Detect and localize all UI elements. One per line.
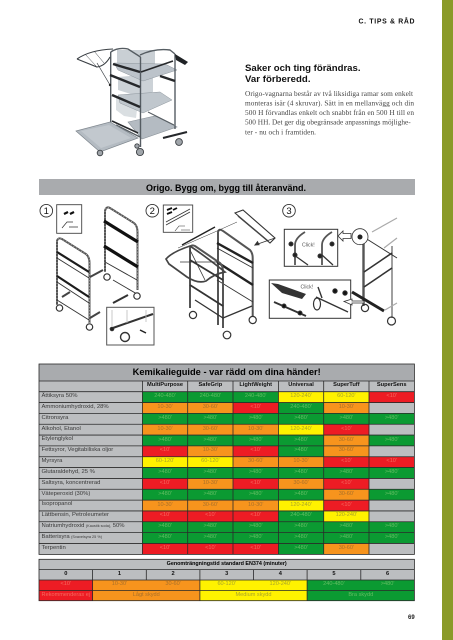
body text: 500 HH. Det ger dig obegränsade anpassnings möjlighe- bbox=[245, 118, 411, 127]
chemical guide table: 30-60' bbox=[339, 447, 354, 453]
chemical guide table: Ättiksyra 50% bbox=[42, 393, 78, 399]
bins bbox=[117, 50, 155, 73]
step 2 illustration bbox=[146, 204, 275, 339]
body text: Origo-vagnarna består av två liksidiga ramar som enkelt bbox=[245, 89, 413, 98]
chemical guide table: <10' bbox=[341, 480, 352, 486]
chemical guide table: <10' bbox=[160, 447, 170, 453]
chemical guide table: >480' bbox=[340, 523, 353, 529]
step number 3: 3 bbox=[286, 206, 292, 217]
chemical guide table: >480' bbox=[204, 415, 217, 421]
legend table: >480' bbox=[381, 581, 394, 587]
body text: monteras isär (4 skruvar). Sätt in en mellanvägg och din bbox=[245, 98, 414, 108]
arrow 2 bbox=[344, 299, 364, 305]
chemical guide table: <10' bbox=[250, 447, 261, 453]
chemical guide table: 10-30' bbox=[157, 426, 173, 432]
chemical guide table: SafeGrip bbox=[199, 382, 222, 388]
shelves bbox=[114, 63, 177, 81]
chemical guide table: >480' bbox=[294, 491, 308, 497]
chemical guide table: <10' bbox=[160, 545, 170, 551]
chemical guide table: 10-30' bbox=[248, 502, 263, 508]
chemical guide table: Citronsyra bbox=[42, 415, 68, 421]
legend table: 5 bbox=[332, 571, 336, 577]
right frame bbox=[104, 207, 140, 303]
legend table: 10-30' bbox=[112, 581, 127, 587]
chemical guide table: >480' bbox=[249, 415, 263, 421]
back frame bbox=[217, 230, 253, 325]
chemical guide table: 10-30' bbox=[157, 404, 173, 410]
frame bbox=[352, 218, 397, 325]
legend table: 1 bbox=[118, 571, 121, 577]
chemical guide table: Isopropanol bbox=[42, 501, 72, 507]
side bar bbox=[442, 0, 453, 640]
section label: C. TIPS & RÅD bbox=[358, 16, 415, 26]
chemical guide table: 10-30' bbox=[293, 458, 309, 464]
detail box 1: Click! bbox=[302, 242, 315, 248]
chemical guide table: >480' bbox=[158, 437, 172, 443]
legend table: Medium skydd bbox=[235, 592, 272, 598]
chemical guide table: >480' bbox=[294, 447, 308, 453]
step number 1 bbox=[40, 204, 53, 217]
chemical guide table: >480' bbox=[204, 469, 217, 475]
legend table bbox=[39, 560, 414, 600]
legend table: 30-60' bbox=[165, 581, 181, 587]
legend table: 0 bbox=[64, 571, 67, 577]
chemical guide table: >480' bbox=[158, 523, 172, 529]
chemical guide table: Fettsyror, Vegitabiliska oljor bbox=[42, 447, 113, 453]
chemical guide table: Universal bbox=[288, 382, 314, 388]
chemical guide table: <10' bbox=[341, 502, 352, 508]
step 1 illustration bbox=[40, 204, 154, 345]
chemical guide table: 60-120' bbox=[156, 458, 174, 464]
chemical guide table: 120-240' bbox=[290, 502, 312, 508]
foot bracket bbox=[163, 132, 187, 138]
chemical guide table: Lättbensin, Petroleumeter bbox=[42, 512, 109, 518]
chemical guide table: >480' bbox=[204, 491, 217, 497]
chemical guide table: 10-30' bbox=[339, 404, 354, 410]
chemical guide table: <10' bbox=[341, 458, 352, 464]
chemical guide table: 10-30' bbox=[203, 447, 218, 453]
chemical guide table: >480' bbox=[294, 437, 308, 443]
chemical guide table: <10' bbox=[250, 512, 261, 518]
chemical guide table: Alkohol, Etanol bbox=[42, 426, 81, 432]
wheels bbox=[97, 139, 182, 156]
chemical guide table: Terpentin bbox=[42, 545, 66, 551]
black bands bbox=[110, 61, 175, 133]
legend table: Genomträngningstid standard EN374 (minuter) bbox=[167, 561, 287, 567]
body text: ter - nu och i framtiden. bbox=[245, 127, 316, 136]
chemical guide table: >480' bbox=[294, 545, 308, 551]
chemical guide table: >480' bbox=[340, 469, 353, 475]
chemical guide table: Etylenglykol bbox=[42, 436, 73, 442]
chemical guide table: >480' bbox=[385, 491, 399, 497]
chemical guide table: 30-60' bbox=[339, 545, 354, 551]
body text bbox=[245, 89, 414, 136]
legend table: Bra skydd bbox=[348, 592, 373, 598]
legend table: Lågt skydd bbox=[133, 592, 160, 598]
chemical guide table: Kemikalieguide - var rädd om dina händer! bbox=[133, 367, 321, 377]
banner: Origo. Bygg om, bygg till återanvänd. bbox=[146, 183, 306, 193]
legend table: <10' bbox=[61, 581, 71, 587]
chemical guide table: Myrsyra bbox=[42, 458, 62, 464]
fold-out rack bbox=[166, 246, 225, 282]
parts box bbox=[57, 205, 82, 233]
body text: 500 H förvandlas enkelt och snabbt från en 500 H till en bbox=[245, 108, 414, 117]
chemical guide table: 240-480' bbox=[245, 393, 267, 399]
chemical guide table: 240-480' bbox=[200, 393, 221, 399]
right handle bbox=[175, 54, 188, 65]
chemical guide table: >480' bbox=[158, 534, 172, 540]
chemical guide table: <10' bbox=[386, 458, 397, 464]
chemical guide table: >480' bbox=[204, 534, 217, 540]
chemical guide table: >480' bbox=[294, 523, 308, 529]
top shelf parts bbox=[178, 210, 275, 248]
chemical guide table: 240-480' bbox=[290, 404, 312, 410]
front frame bbox=[189, 245, 256, 339]
chemical guide table: 120-240' bbox=[336, 512, 357, 518]
chemical guide table: SuperTuff bbox=[333, 382, 360, 388]
chemical guide table: >480' bbox=[204, 437, 217, 443]
chemical guide table: (Svavelsyra 25 %) bbox=[71, 535, 102, 539]
chemical guide table: Natriumhydroxid 50% bbox=[42, 523, 125, 529]
chemical guide table: >480' bbox=[385, 469, 399, 475]
chemical guide table: 30-60' bbox=[203, 426, 218, 432]
chemical guide table: <10' bbox=[205, 545, 216, 551]
page number: 69 bbox=[408, 615, 415, 621]
heading: Var förberedd. bbox=[245, 74, 310, 85]
legend table: 120-240' bbox=[270, 581, 291, 587]
chemical guide table: >480' bbox=[158, 491, 172, 497]
chemical guide table: 240-480' bbox=[154, 393, 176, 399]
chemical guide table: Glutaraldehyd, 25 % bbox=[42, 469, 95, 475]
chemical guide table: <10' bbox=[386, 393, 397, 399]
chemical guide table: >480' bbox=[294, 534, 308, 540]
chemical guide table: 240-480' bbox=[290, 512, 312, 518]
chemical guide table: <10' bbox=[160, 480, 170, 486]
chemical guide table: Väteperoxid (30%) bbox=[42, 491, 90, 497]
chemical guide table: Ammoniumhydroxid, 28% bbox=[42, 404, 109, 410]
heading bbox=[245, 63, 360, 85]
inset detail bbox=[107, 307, 154, 345]
legend table: 6 bbox=[386, 571, 389, 577]
chemical guide table: >480' bbox=[340, 534, 353, 540]
legend table: 3 bbox=[225, 571, 228, 577]
chemical guide table: 10-30' bbox=[248, 426, 263, 432]
legend table: 4 bbox=[279, 571, 282, 577]
chemical guide table: 60-120' bbox=[201, 458, 220, 464]
chemical guide table: 10-30' bbox=[203, 480, 218, 486]
parts box bbox=[163, 205, 193, 232]
banner bbox=[39, 179, 415, 195]
chemical guide table: >480' bbox=[340, 415, 353, 421]
chemical guide table: >480' bbox=[294, 415, 308, 421]
chemical guide table: >480' bbox=[249, 437, 263, 443]
chemical guide table: >480' bbox=[158, 469, 172, 475]
chemical guide table: >480' bbox=[385, 437, 399, 443]
step number 1: 1 bbox=[44, 206, 49, 217]
chemical guide table: >480' bbox=[249, 469, 263, 475]
chemical guide table: <10' bbox=[160, 512, 170, 518]
chemical guide table: >480' bbox=[249, 523, 263, 529]
chemical guide table: <10' bbox=[250, 480, 261, 486]
chemical guide table bbox=[39, 364, 414, 554]
chemical guide table: SuperSens bbox=[377, 382, 407, 388]
chemical guide table: 30-60' bbox=[339, 437, 354, 443]
chemical guide table: 30-60' bbox=[248, 458, 263, 464]
detail box 2: Click! bbox=[300, 284, 313, 290]
chemical guide table: >480' bbox=[385, 534, 399, 540]
chemical guide table: 120-240' bbox=[290, 393, 312, 399]
chemical guide table: >480' bbox=[249, 491, 263, 497]
step number 2: 2 bbox=[150, 206, 155, 217]
chemical guide table: <10' bbox=[250, 545, 261, 551]
step 3 illustration bbox=[269, 204, 397, 325]
bottom left tray bbox=[76, 122, 138, 152]
legend table: 240-480' bbox=[323, 581, 345, 587]
chemical guide table: >480' bbox=[249, 534, 263, 540]
chemical guide table: <10' bbox=[205, 512, 216, 518]
chemical guide table: >480' bbox=[385, 415, 399, 421]
posts bbox=[111, 48, 175, 147]
chemical guide table: >480' bbox=[385, 523, 399, 529]
chemical guide table: >480' bbox=[158, 415, 172, 421]
legend table: 2 bbox=[171, 571, 175, 577]
left fold-out rack bbox=[77, 49, 113, 85]
chemical guide table: <10' bbox=[250, 404, 261, 410]
chemical guide table: <10' bbox=[341, 426, 352, 432]
chemical guide table: LightWeight bbox=[239, 382, 272, 388]
chemical guide table: 30-60' bbox=[293, 480, 309, 486]
chemical guide table: >480' bbox=[294, 469, 308, 475]
chemical guide table: 30-60' bbox=[203, 404, 218, 410]
chemical guide table: 120-240' bbox=[290, 426, 312, 432]
chemical guide table: 10-30' bbox=[157, 502, 173, 508]
chemical guide table: Batterisyra bbox=[42, 534, 70, 540]
chemical guide table: Saltsyra, koncentrerad bbox=[42, 480, 100, 486]
chemical guide table: (Kaustik soda), bbox=[86, 524, 111, 528]
bottom right tray bbox=[128, 116, 177, 139]
left frame bbox=[56, 238, 103, 330]
chemical guide table: >480' bbox=[204, 523, 217, 529]
product photo: cart bbox=[76, 48, 188, 156]
chemical guide table: 30-60' bbox=[203, 502, 218, 508]
heading: Saker och ting förändras. bbox=[245, 63, 360, 74]
chemical guide table: 30-60' bbox=[339, 491, 354, 497]
chemical guide table: 60-120' bbox=[337, 393, 356, 399]
legend table: 60-120' bbox=[217, 581, 236, 587]
chemical guide table: MultiPurpose bbox=[147, 382, 183, 388]
arrow 1 bbox=[338, 231, 351, 241]
legend table: Rekommenderas ej bbox=[42, 592, 90, 598]
